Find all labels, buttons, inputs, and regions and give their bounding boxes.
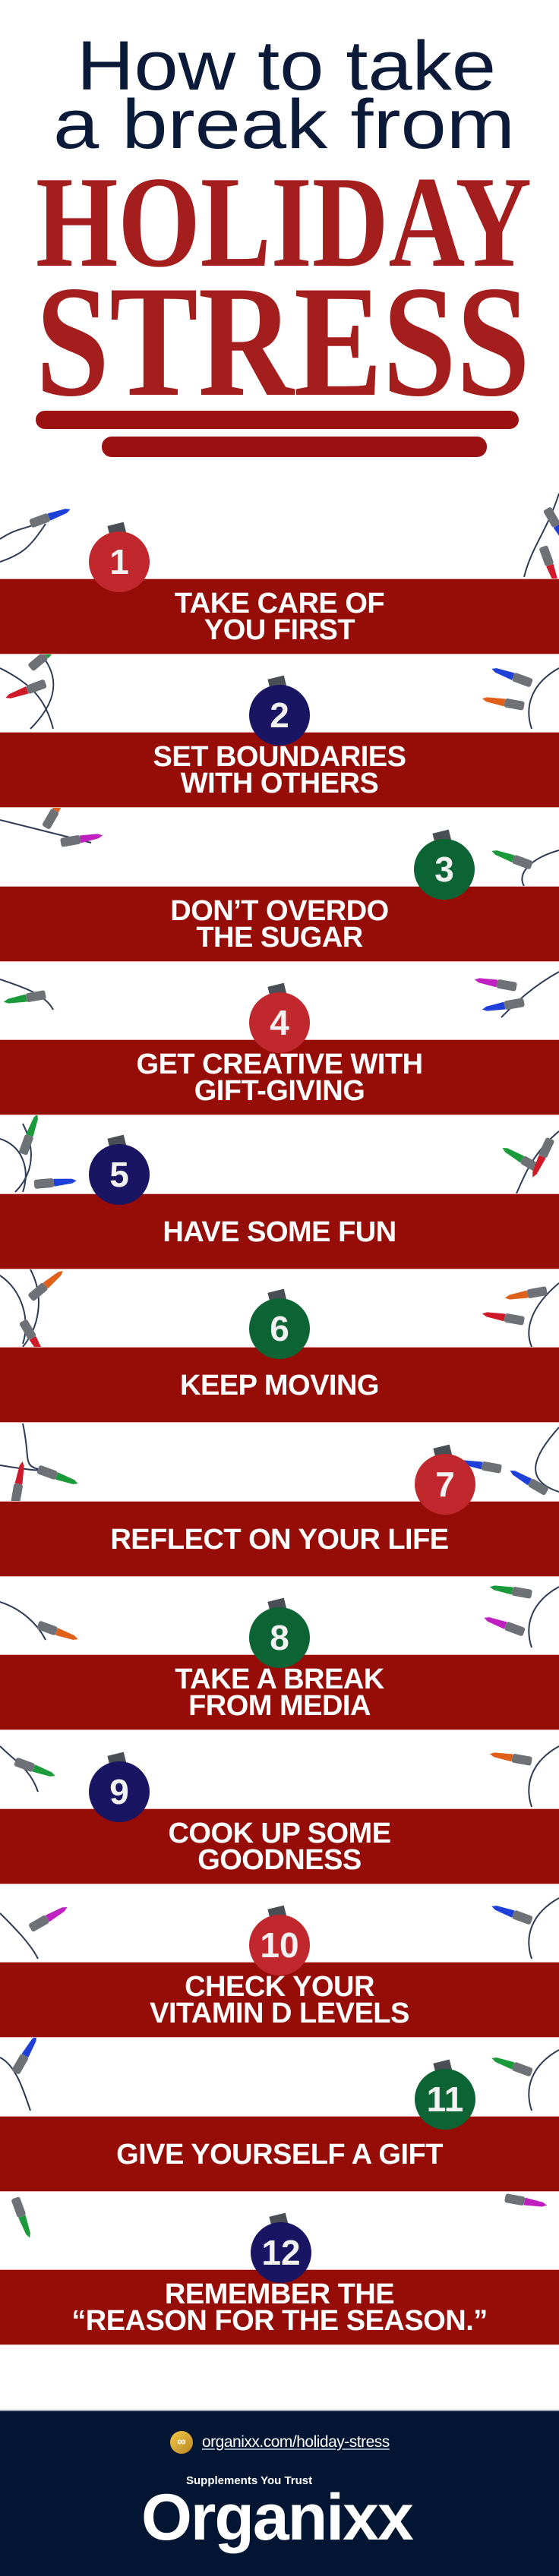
tagline: Supplements You Trust [186,2474,312,2487]
title line 2: a break from [53,86,515,163]
step 5 [0,1193,559,1269]
step 4: GET CREATIVE WITH [136,1048,423,1080]
ornament 4 [249,982,310,1053]
step 2: SET BOUNDARIES [153,741,406,773]
url link [170,2431,390,2454]
ornament 3: 3 [434,850,454,889]
step 10 [0,1962,559,2038]
step 6: KEEP MOVING [180,1370,379,1402]
step 8: FROM MEDIA [188,1690,371,1722]
ornament 8 [249,1597,310,1668]
footer [0,2410,559,2576]
icon: link: ∞ [177,2436,186,2448]
step 2 [0,732,559,808]
step 8 [0,1654,559,1730]
ornament 9 [89,1752,150,1822]
ornament 7: 7 [435,1465,455,1504]
ornament 8: 8 [270,1618,289,1657]
title line 1: How to take [77,27,496,105]
step 6 [0,1347,559,1423]
step 7: REFLECT ON YOUR LIFE [110,1523,449,1555]
step 9: COOK UP SOME [168,1818,391,1849]
ornament 7 [415,1444,475,1515]
step 9: GOODNESS [197,1844,362,1876]
step 3: DON’T OVERDO [170,895,389,927]
step 3 [0,886,559,962]
step 4: GIFT-GIVING [194,1075,365,1107]
ornament 1: 1 [109,542,129,582]
step 9 [0,1808,559,1884]
icon: link [170,2431,193,2454]
step 5: HAVE SOME FUN [163,1216,396,1248]
ornament 12 [251,2212,311,2283]
ornament 11: 11 [427,2079,463,2119]
step 7 [0,1501,559,1577]
title [36,27,532,457]
step 1 [0,579,559,654]
logo: Organixx [141,2481,412,2554]
underline bars [36,411,519,457]
ornament 6: 6 [270,1309,289,1348]
url link: organixx.com/holiday-stress [202,2433,390,2451]
step 3: THE SUGAR [196,922,363,954]
step 12: “REASON FOR THE SEASON.” [71,2305,488,2337]
ornament 6 [249,1289,310,1359]
ornament 9: 9 [109,1772,129,1811]
step 1: TAKE CARE OF [175,588,384,620]
step 11 [0,2116,559,2192]
ornament 4: 4 [270,1003,289,1042]
ornament 11 [415,2059,475,2130]
ornament 2 [249,676,310,746]
step 1: YOU FIRST [204,614,355,646]
ornament 5: 5 [109,1155,129,1194]
ornament 10: 10 [260,1925,299,1965]
ornament 3 [414,829,475,900]
step 10: CHECK YOUR [185,1971,374,2003]
step 4 [0,1039,559,1115]
step 12 [0,2269,559,2345]
ornament 1 [89,522,150,592]
ornament 5 [89,1134,150,1205]
step 10: VITAMIN D LEVELS [150,1997,409,2029]
step 2: WITH OTHERS [181,768,378,799]
ornament 10 [249,1906,310,1975]
step 11: GIVE YOURSELF A GIFT [116,2138,443,2170]
step 12: REMEMBER THE [165,2278,394,2310]
ornament 2: 2 [270,695,289,735]
ornament 12: 12 [261,2233,301,2272]
step 8: TAKE A BREAK [175,1663,384,1695]
